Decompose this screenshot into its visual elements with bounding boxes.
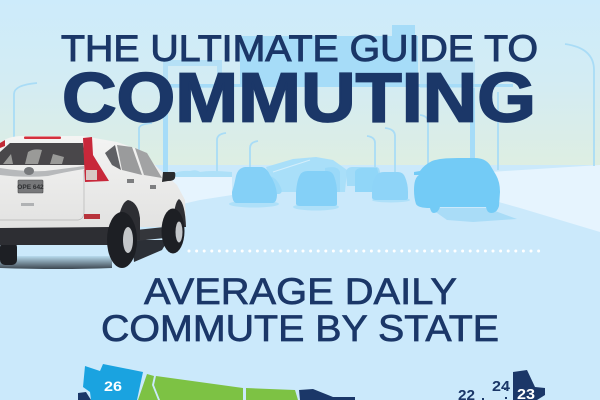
car silhouette behind left [268, 176, 282, 194]
wheel arch front [173, 199, 186, 227]
side mirror [162, 172, 175, 182]
car silhouette centre [296, 171, 337, 206]
state: Maine [513, 370, 545, 400]
car silhouette mid right [355, 168, 381, 192]
far tree line [172, 170, 232, 177]
tail light right [83, 137, 109, 182]
side sill [136, 226, 174, 241]
right road shoulder [490, 165, 600, 232]
car ground shadow rear [0, 256, 112, 269]
dotted divider [189, 250, 541, 252]
roof spoiler brake light [24, 136, 61, 139]
car shadow left [229, 200, 279, 208]
car silhouette far right [346, 167, 380, 186]
licence plate text: OPE 642 [17, 184, 44, 191]
sign panel main [240, 36, 418, 86]
state: Idaho [138, 374, 158, 400]
sign support [497, 92, 499, 170]
car shadow centre [293, 204, 339, 210]
street light far right [565, 44, 594, 166]
chrome trim bar [0, 166, 84, 177]
section heading line two: COMMUTE BY STATE [101, 308, 499, 349]
street light centre right [385, 128, 395, 172]
photo car [0, 136, 186, 269]
window highlights [3, 149, 64, 164]
sign left post [163, 62, 168, 172]
state: Washington [83, 364, 143, 400]
car ground shadow side [132, 240, 168, 262]
front wheel rim [176, 222, 182, 242]
street light centre left [250, 141, 258, 168]
New Hampshire value: 24 [492, 378, 511, 395]
car silhouette left [232, 167, 277, 203]
car shadow front [430, 208, 517, 222]
state: Minnesota [299, 389, 355, 400]
street lights [14, 44, 594, 172]
sign frame left [163, 60, 222, 88]
car shadow right [372, 198, 410, 202]
Washington value: 26 [104, 378, 122, 394]
title line one: THE ULTIMATE GUIDE TO [61, 27, 538, 69]
street light far left [14, 83, 37, 138]
car silhouette front [414, 158, 500, 213]
tail light left [0, 140, 5, 148]
lower bumper [0, 227, 120, 245]
licence plate [18, 180, 43, 193]
side window middle [117, 145, 142, 175]
car body [0, 136, 186, 228]
state: North Dakota [246, 388, 298, 400]
sign frame right [420, 60, 475, 88]
side window rear quarter [105, 145, 121, 170]
overhead sign gantry [163, 25, 513, 172]
left road shoulder [165, 174, 232, 208]
door handles [127, 179, 156, 189]
rear reflector [84, 214, 100, 219]
side window front [135, 148, 162, 178]
sign right post [470, 62, 475, 158]
gantry beam [163, 84, 513, 87]
rear wheel rim [123, 227, 133, 253]
tailgate seam [0, 170, 84, 220]
street light right [420, 115, 428, 170]
state: Oregon corner [78, 392, 91, 400]
rear tyre right [107, 212, 137, 268]
wheel arch rear [116, 200, 140, 240]
distant traffic on road [266, 157, 347, 192]
title line two: COMMUTING [62, 58, 536, 136]
road lane marking [273, 160, 310, 172]
coastal islands [482, 388, 507, 400]
tail light lens [86, 170, 97, 180]
street light centre [367, 136, 375, 168]
car silhouette right [372, 172, 408, 200]
state: Montana [154, 376, 243, 400]
road surface [0, 165, 600, 400]
section heading line one: AVERAGE DAILY [144, 271, 457, 312]
badge [24, 167, 34, 175]
trunk handle [21, 203, 34, 206]
background sky [0, 0, 600, 176]
rear window [0, 143, 85, 165]
rear tyre left [0, 242, 17, 265]
car silhouette behind centre [325, 167, 340, 192]
front tyre [162, 208, 184, 254]
street light left [139, 123, 152, 150]
street light mid left [217, 133, 226, 172]
sign panel top [392, 25, 415, 38]
map of states [78, 364, 545, 400]
